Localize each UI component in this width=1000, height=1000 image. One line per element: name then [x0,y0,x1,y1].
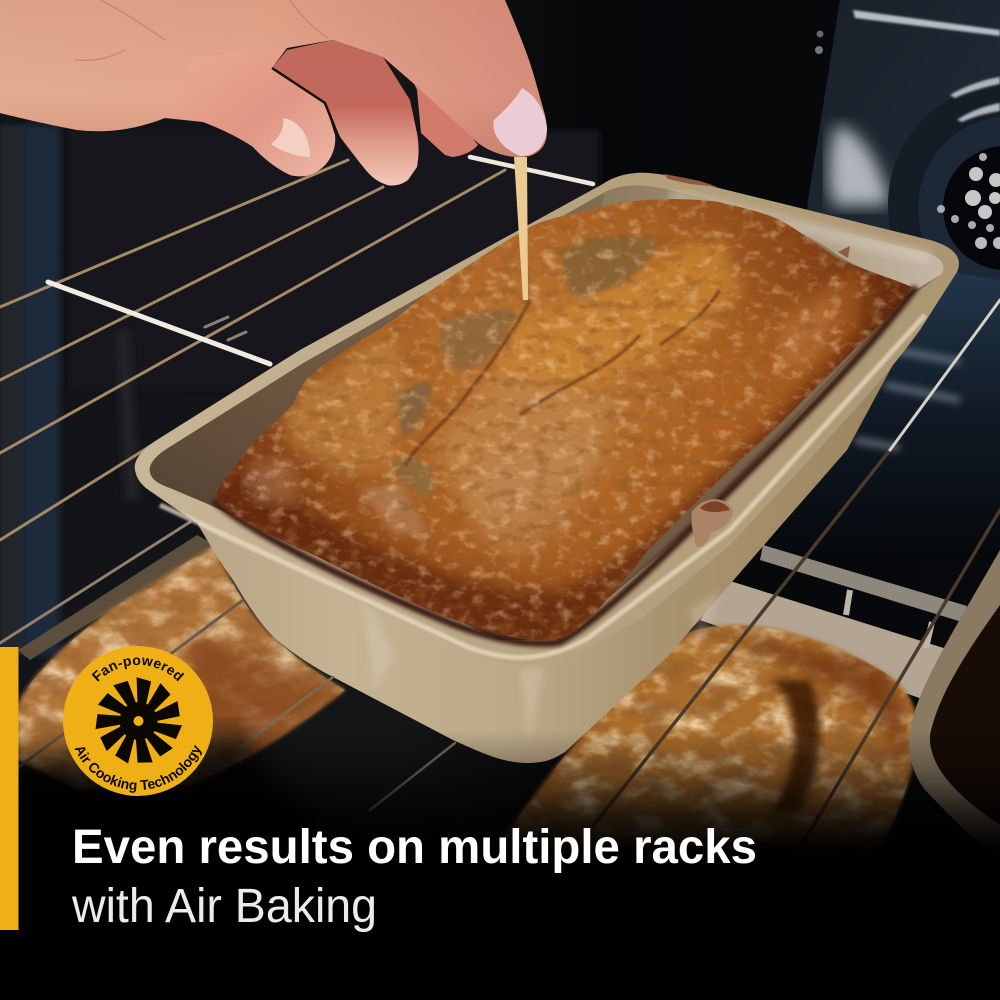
inner wall, left and top [150,186,943,640]
pan inner walls and rim [135,173,959,665]
badge text top: Fan-powered [92,657,184,682]
main loaf pan [135,173,959,763]
icon: fan [95,677,182,765]
headline: Even results on multiple racks [72,821,757,874]
lower rack loaf, left [18,535,347,790]
cracks of paler crumb [562,236,655,300]
middle finger [272,40,419,185]
pan body [137,268,958,763]
lower rack pan, right [700,545,967,700]
oven back wall with convection fan [760,0,1000,560]
left lobe [285,330,412,475]
nail on index finger [271,118,310,157]
light streaks on pan body [360,585,720,745]
badge text bottom: Air Cooking Technology [74,744,202,793]
palm and thumb [0,0,547,157]
left shadow below badge [0,730,340,860]
batter drip on rim [691,499,733,547]
badge: Fan-powered Air Cooking Technology [63,646,213,796]
front rim highlight [160,315,925,657]
right slope [736,273,866,444]
oven racks, upper [0,157,593,643]
index finger [165,48,335,176]
third loaf pan, right edge [909,550,1000,858]
golden central ridge [490,233,742,390]
lower racks crossing in front [15,300,1000,848]
subheading: with Air Baking [71,880,377,933]
inner wall, right [600,185,943,292]
footer black panel [0,858,1000,1000]
bottom dark fade [0,730,1000,860]
hand holding toothpick [0,0,547,185]
sheen lower left [245,458,298,505]
yellow accent bar [0,647,18,930]
ring finger [408,70,478,157]
main loaf of banana bread [200,174,930,650]
lower rack loaf, centre [505,622,916,843]
thumb nail [493,88,547,156]
toothpick [514,157,528,300]
dark lower band [205,270,925,650]
